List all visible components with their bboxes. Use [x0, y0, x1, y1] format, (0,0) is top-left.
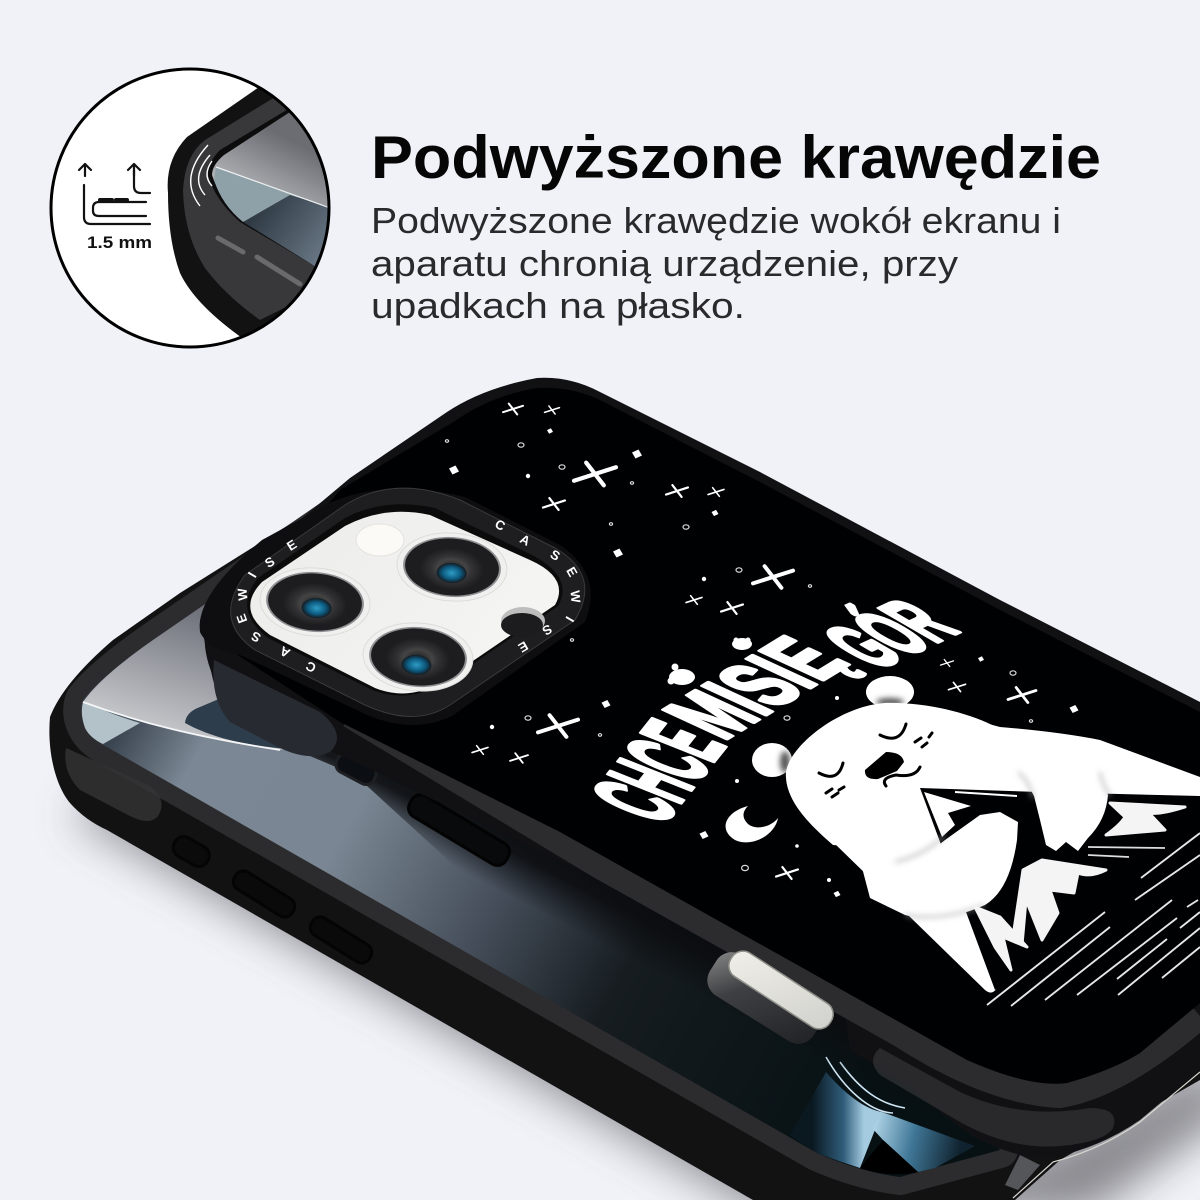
lettering: tiny bear left [668, 664, 695, 685]
moon [726, 806, 778, 842]
lower phone: screen [81, 470, 1000, 1177]
bear: lower body [833, 820, 997, 993]
top phone: outer case frame [204, 378, 1200, 1158]
lettering: CHCE MISIĘ GÓR [568, 587, 979, 835]
lower phone: bumper highlight patch [65, 748, 162, 821]
camera: CASEWISE branding on ring: S [548, 546, 563, 564]
lettering: CHCE MISIĘ GÓR: CHCE [568, 707, 749, 835]
body text: Podwyższone krawędzie wokół ekranu i [371, 200, 1061, 241]
bear: mountain apex snow [924, 792, 971, 837]
bear: face [819, 724, 932, 797]
screen: navy shape [185, 690, 300, 750]
body text [371, 200, 1061, 326]
bear: mountain ridge line [955, 792, 1017, 796]
bear: right arm [1020, 770, 1108, 851]
bear: snow patch middle [1014, 860, 1106, 945]
bear: upper body sloping right [960, 723, 1200, 800]
camera: lens left [258, 564, 372, 640]
screen: grey wallpaper area [83, 470, 420, 750]
circle: raised edge diagram icon [79, 164, 150, 224]
top phone: lighter bumper band [350, 715, 1200, 1095]
lower phone: volume down button [307, 914, 375, 966]
camera: CASEWISE branding on ring: S [248, 628, 263, 646]
top phone: rim line at bottom right [1013, 1072, 1200, 1198]
camera: lens top [395, 529, 509, 605]
bear: head [786, 703, 995, 846]
lower phone: volume up button [230, 868, 298, 920]
camera: CASEWISE branding on ring: E [233, 612, 250, 625]
circle: case corner photo [168, 85, 340, 340]
camera: CASEWISE branding on ring: E [563, 564, 581, 580]
camera: inner bevel [247, 504, 563, 695]
camera module [200, 488, 591, 725]
camera: CASEWISE branding on ring: C [303, 658, 319, 676]
body text: upadkach na płasko. [371, 285, 745, 326]
bear: ears [866, 676, 914, 708]
circle: bumper highlights [218, 238, 300, 284]
camera: CASEWISE branding on ring: W [234, 587, 251, 601]
camera: lens bottom [361, 619, 475, 695]
bear: snow strokes [1088, 847, 1165, 857]
drop shadows under the phones [70, 790, 1200, 1200]
bear: forearm shading [895, 835, 985, 917]
camera: CASEWISE branding on ring: A [517, 531, 533, 549]
top phone: charging port [701, 945, 838, 1051]
top phone: button on side [405, 791, 513, 869]
lettering: tiny bear right [732, 638, 752, 650]
top phone: black back panel [215, 388, 1200, 1084]
camera: CASEWISE branding on ring: W [567, 590, 584, 604]
circle: white pressure arcs [191, 145, 212, 206]
bear: snow patch bottom [975, 907, 1027, 970]
lower phone: bumper frame [49, 455, 1200, 1200]
camera: raised body [200, 489, 591, 725]
camera: CASEWISE branding on ring: I [562, 614, 577, 625]
camera: glass window [250, 512, 559, 693]
top phone: mute switch [333, 750, 379, 788]
bear: ear shading [780, 698, 904, 773]
top phone: bumper patch bottom right [873, 1048, 1114, 1146]
heading: Podwyższone krawędzie [371, 124, 1101, 191]
speed lines [987, 833, 1200, 1006]
screen: blue wallpaper wedges [790, 1057, 975, 1174]
camera: CASEWISE branding on ring: S [262, 553, 278, 571]
lettering: CHCE MISIĘ GÓR: MISIĘ [642, 626, 871, 750]
top phone: translucent side wall [200, 620, 1000, 1120]
lettering: CHCE MISIĘ GÓR: GÓR [800, 587, 979, 681]
camera: CASEWISE branding on ring: S [539, 621, 555, 639]
screen: pale blue wedge [82, 702, 140, 744]
camera: CASEWISE branding on ring: E [284, 536, 300, 554]
bear: nose [865, 752, 904, 779]
stars on the case [445, 404, 1078, 897]
camera: ring with branding [231, 488, 585, 716]
bear: left forearm and paw [860, 812, 1018, 918]
lower phone: ring-silent button [170, 833, 213, 870]
camera: CASEWISE branding on ring [233, 516, 584, 676]
top phone: bumper patch under camera [213, 660, 337, 756]
bear: mountain dark silhouette [920, 788, 1200, 990]
panel: raised edge close-up circle [51, 69, 340, 347]
camera: CASEWISE branding on ring: I [245, 569, 260, 580]
body text: aparatu chronią urządzenie, przy [371, 243, 958, 284]
camera: CASEWISE branding on ring: C [492, 516, 508, 534]
camera: CASEWISE branding on ring: E [515, 638, 531, 656]
circle: case screen [212, 112, 328, 266]
bear: arm shading [1018, 772, 1110, 798]
bear illustration [752, 676, 1200, 993]
bear: snow patch right [1106, 803, 1185, 835]
circle: 1.5 mm label: 1.5 mm [87, 233, 152, 252]
screen: white wallpaper curve [83, 702, 280, 750]
camera: CASEWISE branding on ring: A [277, 643, 293, 661]
lower phone: bottom right port glimpse [1005, 1155, 1040, 1190]
camera: microphone hole [501, 607, 545, 637]
lower phone: inner bumper band [81, 470, 1000, 1177]
camera: flash [356, 524, 404, 556]
